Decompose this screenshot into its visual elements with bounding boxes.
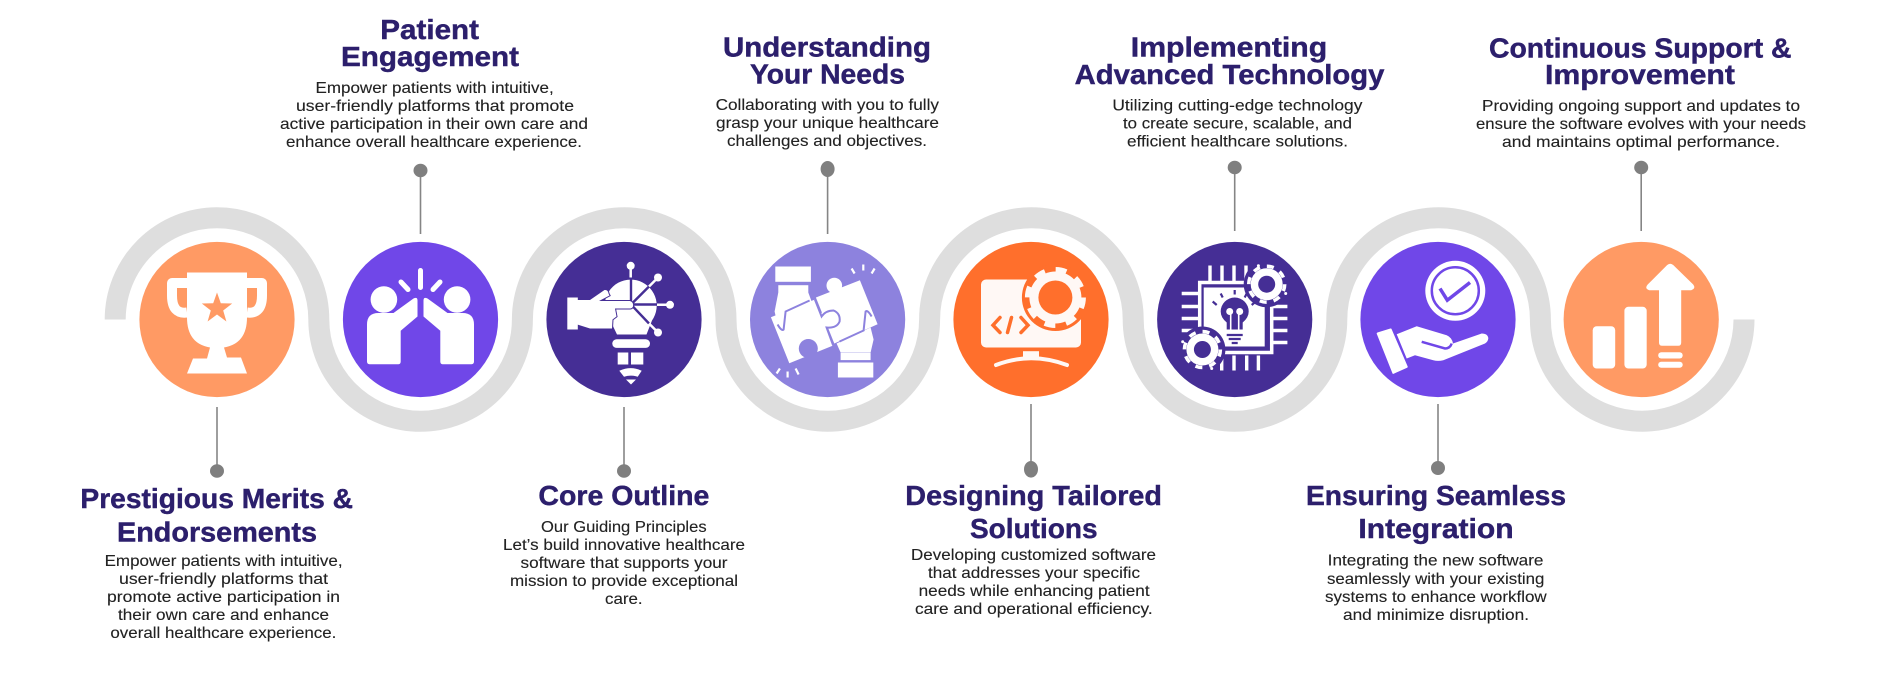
heading [1075, 32, 1385, 90]
heading: Solutions [970, 513, 1098, 544]
step 4: Understanding Your Needs [716, 32, 939, 397]
body text: Empower patients with intuitive, [105, 553, 343, 570]
heading: Improvement [1545, 59, 1735, 90]
connector line and dot [1228, 161, 1242, 231]
winding ribbon path [115, 218, 1744, 421]
body text [911, 547, 1156, 618]
body text: Collaborating with you to fully [716, 97, 939, 114]
body text: overall healthcare experience. [110, 625, 336, 642]
body text: Utilizing cutting-edge technology [1112, 98, 1362, 115]
icon: monitor with gear and code on orange circle [953, 242, 1109, 397]
body text [105, 553, 343, 642]
heading: Core Outline [538, 480, 709, 511]
icon: chip with lightbulb and gears on indigo circle [1157, 242, 1312, 397]
icon: trophy on orange circle [139, 242, 295, 397]
body text: Providing ongoing support and updates to [1482, 98, 1800, 115]
connector line and dot [617, 407, 631, 478]
body text: enhance overall healthcare experience. [286, 134, 582, 151]
heading: Advanced Technology [1075, 59, 1385, 90]
heading: Implementing [1131, 32, 1327, 63]
connector line and dot [414, 164, 428, 234]
body text: to create secure, scalable, and [1123, 116, 1352, 133]
step 5: Designing Tailored Solutions [905, 242, 1162, 618]
body text [280, 80, 588, 151]
heading [905, 480, 1162, 544]
icon: open hand with check badge on violet circle [1360, 242, 1516, 397]
icon: high five on violet circle [343, 242, 498, 397]
heading: Endorsements [117, 517, 317, 548]
body text: and minimize disruption. [1343, 607, 1529, 624]
heading: Prestigious Merits & [80, 483, 353, 514]
body text [503, 519, 745, 608]
body text: software that supports your [520, 555, 728, 572]
body text: mission to provide exceptional [510, 573, 738, 590]
body text: Empower patients with intuitive, [316, 80, 554, 97]
body text: their own care and enhance [118, 607, 329, 624]
heading [341, 14, 519, 72]
step 7: Ensuring Seamless Integration [1306, 242, 1566, 624]
body text: that addresses your specific [928, 565, 1140, 582]
body text [1112, 98, 1362, 151]
body text: grasp your unique healthcare [716, 115, 939, 132]
body text: and maintains optimal performance. [1502, 134, 1780, 151]
body text: ensure the software evolves with your needs [1476, 116, 1806, 133]
heading: Designing Tailored [905, 480, 1162, 511]
step 2: Patient Engagement [280, 14, 588, 397]
connector line and dot [210, 407, 224, 478]
step 1: Prestigious Merits & Endorsements [80, 242, 353, 642]
step 3: Core Outline [503, 242, 745, 608]
body text: care. [605, 591, 643, 608]
connector line and dot [1024, 404, 1038, 478]
body text: Our Guiding Principles [541, 519, 707, 536]
heading [80, 483, 353, 548]
body text: needs while enhancing patient [919, 583, 1150, 600]
body text: promote active participation in [107, 589, 340, 606]
body text: challenges and objectives. [727, 133, 927, 150]
heading: Patient [380, 14, 479, 45]
body text: Developing customized software [911, 547, 1156, 564]
step 6: Implementing Advanced Technology [1075, 32, 1385, 397]
icon: rising bars and arrow on orange circle [1564, 242, 1719, 397]
body text [716, 97, 939, 150]
body text [1476, 98, 1806, 151]
step 8: Continuous Support & Improvement [1476, 33, 1806, 397]
body text: care and operational efficiency. [915, 601, 1153, 618]
heading: Integration [1358, 513, 1514, 544]
heading: Ensuring Seamless [1306, 480, 1566, 511]
connector line and dot [1634, 161, 1648, 231]
connector line and dot [1431, 404, 1445, 475]
heading: Engagement [341, 41, 519, 72]
heading: Your Needs [750, 59, 905, 90]
heading [1306, 480, 1566, 544]
body text: user-friendly platforms that [119, 571, 329, 588]
icon: hand, lightbulb and pencil on indigo circle [546, 242, 702, 397]
body text [1325, 553, 1547, 624]
connector line and dot [821, 161, 835, 234]
body text: Let’s build innovative healthcare [503, 537, 745, 554]
heading [723, 32, 931, 90]
body text: user-friendly platforms that promote [296, 98, 574, 115]
heading: Understanding [723, 32, 931, 63]
body text: active participation in their own care and [280, 116, 588, 133]
heading [1489, 33, 1792, 90]
body text: systems to enhance workflow [1325, 589, 1547, 606]
body text: Integrating the new software [1328, 553, 1544, 570]
body text: seamlessly with your existing [1327, 571, 1544, 588]
icon: hands joining puzzle pieces on lavender circle [750, 242, 905, 397]
heading: Continuous Support & [1489, 33, 1792, 64]
body text: efficient healthcare solutions. [1127, 134, 1348, 151]
